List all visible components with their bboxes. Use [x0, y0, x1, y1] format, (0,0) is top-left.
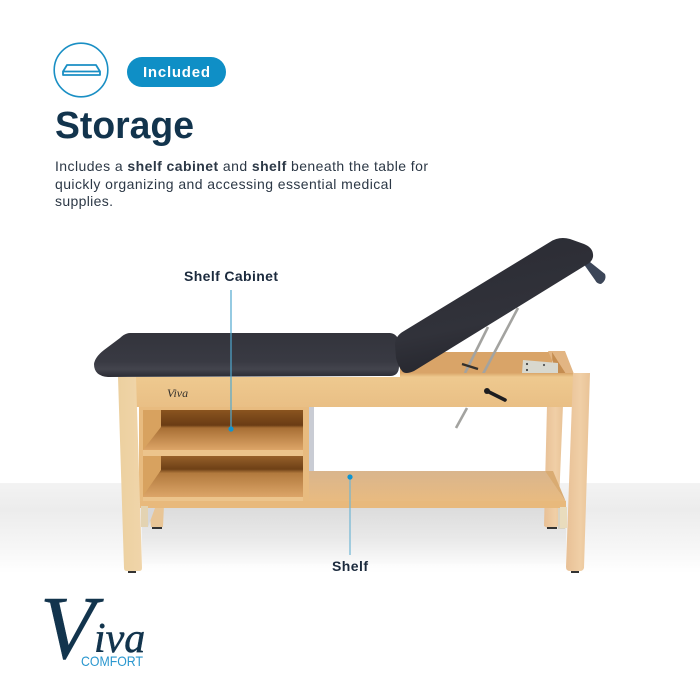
headrest bracket	[583, 262, 606, 284]
left cushion	[94, 333, 399, 377]
floor shadow beneath table	[142, 508, 566, 564]
callout: Shelf	[332, 474, 368, 574]
badge: Included	[127, 57, 226, 87]
icon: shelf in circle	[54, 43, 108, 97]
cabinet	[139, 407, 314, 503]
apron	[136, 373, 574, 407]
massage table	[94, 238, 606, 573]
description text: supplies.	[55, 193, 113, 209]
logo: Viva Comfort	[40, 579, 145, 678]
back right leg	[544, 405, 563, 528]
background floor	[0, 483, 700, 573]
logo: Viva Comfort: V	[40, 579, 104, 678]
raised backrest	[395, 238, 593, 373]
callout: Shelf Cabinet: Shelf Cabinet	[184, 268, 278, 284]
rear hinge plate	[522, 360, 558, 373]
brackets	[141, 506, 148, 527]
rod bracket	[462, 364, 478, 369]
support rods	[456, 308, 518, 428]
description text: Includes a shelf cabinet and shelf beneath the table for	[55, 158, 428, 174]
apron logo: Viva	[167, 386, 188, 400]
right front leg	[566, 373, 590, 571]
badge: Included: Included	[143, 64, 210, 81]
logo: Viva Comfort: COMFORT	[81, 653, 143, 669]
callout: Shelf: Shelf	[332, 558, 368, 574]
logo: Viva Comfort: iva	[94, 616, 145, 662]
left front leg	[118, 377, 142, 571]
description text: quickly organizing and accessing essential medical	[55, 176, 392, 192]
lever	[484, 388, 505, 400]
back left leg	[149, 505, 164, 527]
storage box interior	[400, 352, 552, 374]
callout: Shelf Cabinet	[184, 268, 278, 432]
title: Storage	[55, 105, 194, 147]
bottom shelf	[140, 471, 566, 508]
